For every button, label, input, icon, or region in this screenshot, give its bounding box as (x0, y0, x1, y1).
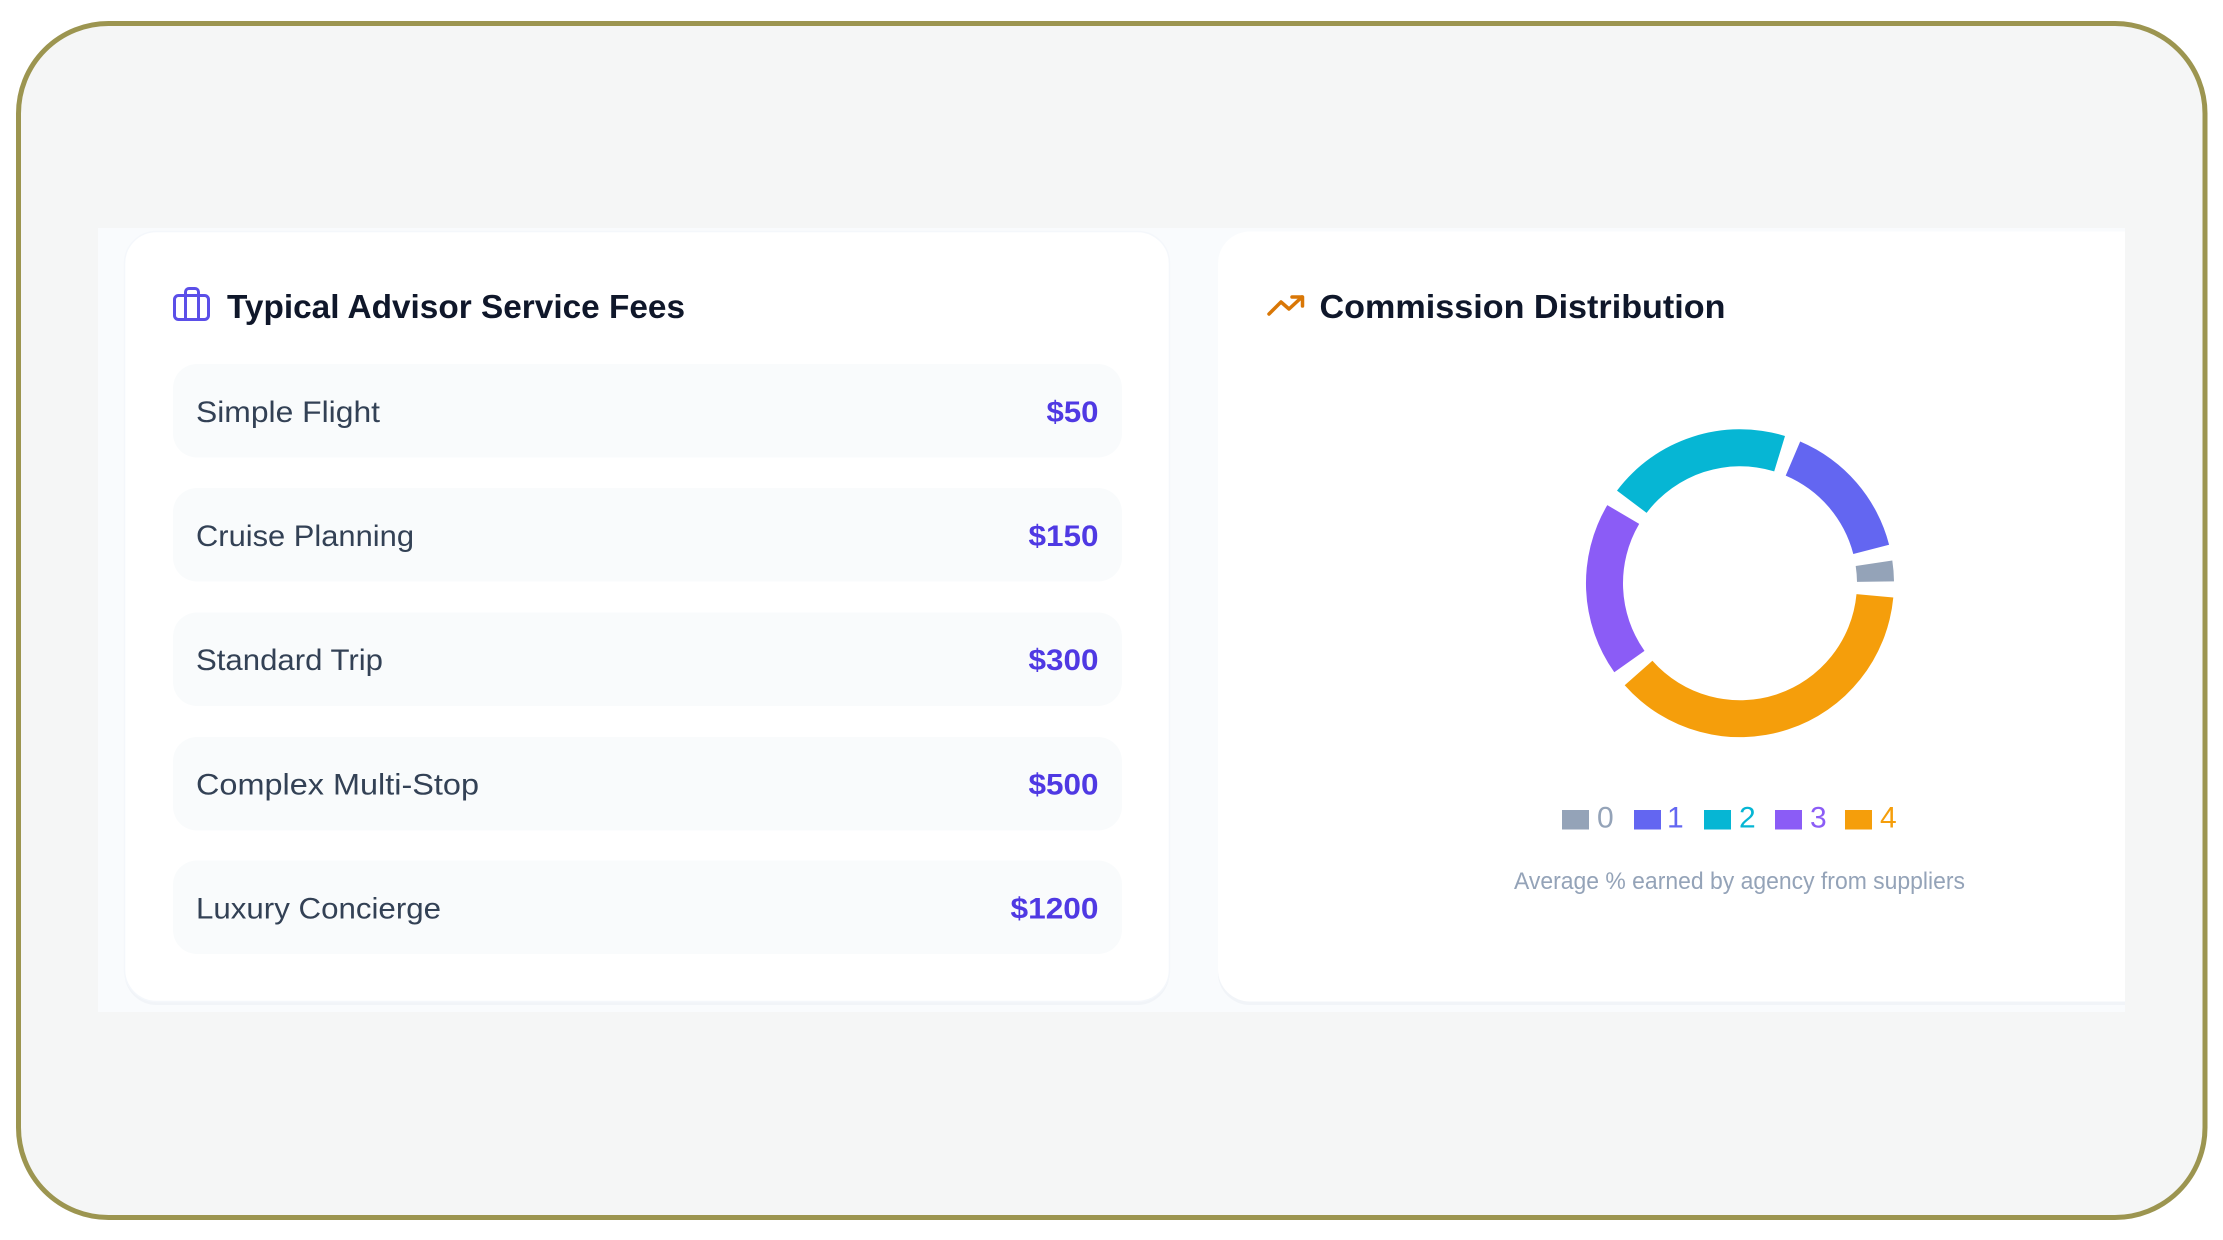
fee row: cruise planning: $150 (1028, 520, 1098, 553)
legend item 0: 0 (1597, 802, 1614, 834)
panel: commission distribution (1218, 232, 2125, 1005)
donut chart (1586, 429, 1894, 737)
legend item 1: 1 (1667, 802, 1684, 834)
legend (1562, 802, 1897, 834)
panel card: commission (1218, 232, 2125, 1005)
legend item 4: 4 (1880, 802, 1897, 834)
segment 4 (1625, 594, 1893, 737)
fee row: cruise planning (173, 488, 1122, 582)
legend item 0 (1562, 802, 1614, 834)
fee row: standard trip: $300 (1028, 644, 1098, 677)
legend item 2: 2 (1739, 802, 1756, 834)
fee row: luxury concierge: $1200 (1010, 892, 1098, 926)
heading: commission distribution: Commission Distribution (1320, 288, 1726, 325)
legend item 3: 3 (1810, 802, 1827, 834)
fee row: simple flight: Simple Flight (196, 396, 381, 429)
fee row: luxury concierge (173, 860, 1122, 954)
segment 3 (1586, 505, 1644, 672)
chart caption: Average % earned by agency from suppliers (1514, 868, 1965, 895)
heading: typical advisor service fees: Typical Advisor Service Fees (227, 288, 685, 325)
segment 0 (1856, 560, 1894, 582)
fee row: cruise planning: Cruise Planning (196, 520, 414, 553)
legend item 2 (1704, 802, 1756, 834)
segment 2 (1617, 429, 1785, 513)
segment 1 (1786, 442, 1889, 554)
legend item 1 (1634, 802, 1684, 834)
fee row: standard trip: Standard Trip (196, 644, 383, 677)
fee row: simple flight (173, 364, 1122, 458)
fee row: complex multi-stop: $500 (1028, 768, 1098, 802)
fee row: complex multi-stop (173, 737, 1122, 830)
panel: typical advisor service fees (124, 232, 1170, 1005)
content strip background (98, 228, 2125, 1012)
legend item 3 (1775, 802, 1827, 834)
fee row: complex multi-stop: Complex Multi-Stop (196, 768, 479, 802)
fee row: standard trip (173, 612, 1122, 706)
panel card: fees (124, 232, 1170, 1005)
legend item 4 (1845, 802, 1897, 834)
icon: briefcase (174, 288, 208, 320)
fee row: luxury concierge: Luxury Concierge (196, 892, 441, 926)
icon: trending up arrow (1269, 297, 1302, 314)
fee row: simple flight: $50 (1046, 396, 1098, 429)
